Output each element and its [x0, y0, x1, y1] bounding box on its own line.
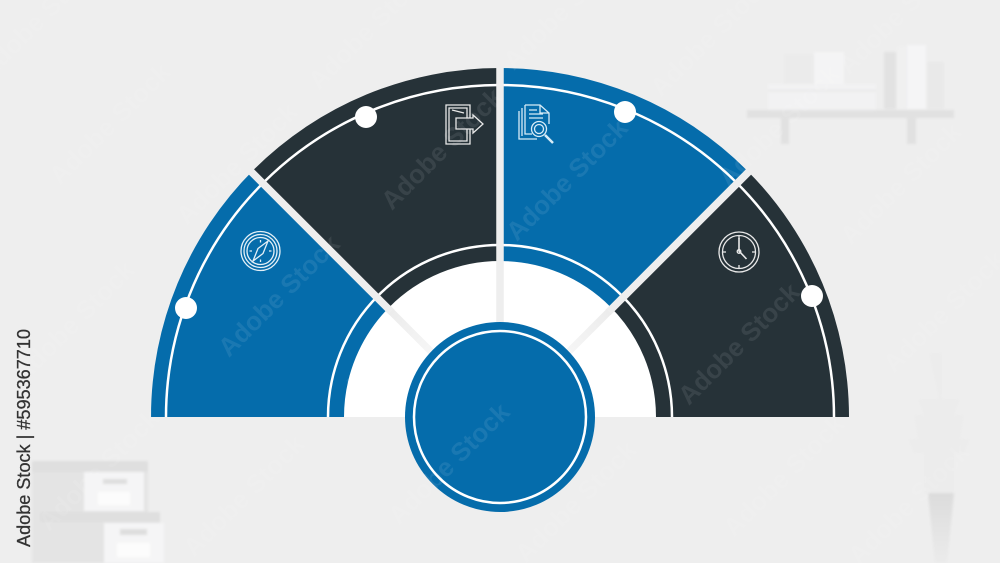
stock watermarks: Adobe Stock [32, 402, 166, 536]
stock watermarks: Adobe Stock [43, 56, 177, 190]
stock watermarks: Adobe Stock [717, 408, 851, 542]
background shelf with books [747, 45, 954, 144]
stock watermarks: Adobe Stock [375, 81, 509, 215]
stock watermarks: Adobe Stock [177, 428, 311, 562]
icon: exit door with arrow [446, 105, 483, 144]
stock id label: Adobe Stock | #595367710 [13, 329, 34, 547]
outer and inner white ring lines [166, 85, 834, 417]
stock watermarks: Adobe Stock [712, 58, 846, 192]
segment 4: dark right [610, 170, 849, 417]
stock watermarks: Adobe Stock [337, 268, 471, 402]
stock watermarks: Adobe Stock [7, 254, 141, 388]
icon: clock [719, 232, 759, 272]
stock watermarks: Adobe Stock [672, 276, 806, 410]
background potted plant [908, 353, 970, 563]
semicircle white centre [344, 261, 656, 417]
stock watermarks: Adobe Stock [382, 396, 516, 530]
segment 3: blue upper right [500, 68, 747, 307]
stock watermarks: Adobe Stock [212, 228, 346, 362]
stock watermarks: Adobe Stock [500, 112, 634, 246]
icon: documents with magnifier [519, 105, 553, 143]
stock watermarks: Adobe Stock [834, 116, 968, 250]
icon: compass [241, 232, 280, 270]
segment 2: dark upper left [253, 68, 500, 307]
marker dots [175, 101, 823, 319]
dividers between segments [246, 66, 754, 352]
background filing boxes [32, 461, 164, 563]
segment 1: blue left [151, 170, 390, 417]
stock watermarks: Adobe Stock [170, 96, 304, 230]
centre circle [405, 322, 595, 512]
